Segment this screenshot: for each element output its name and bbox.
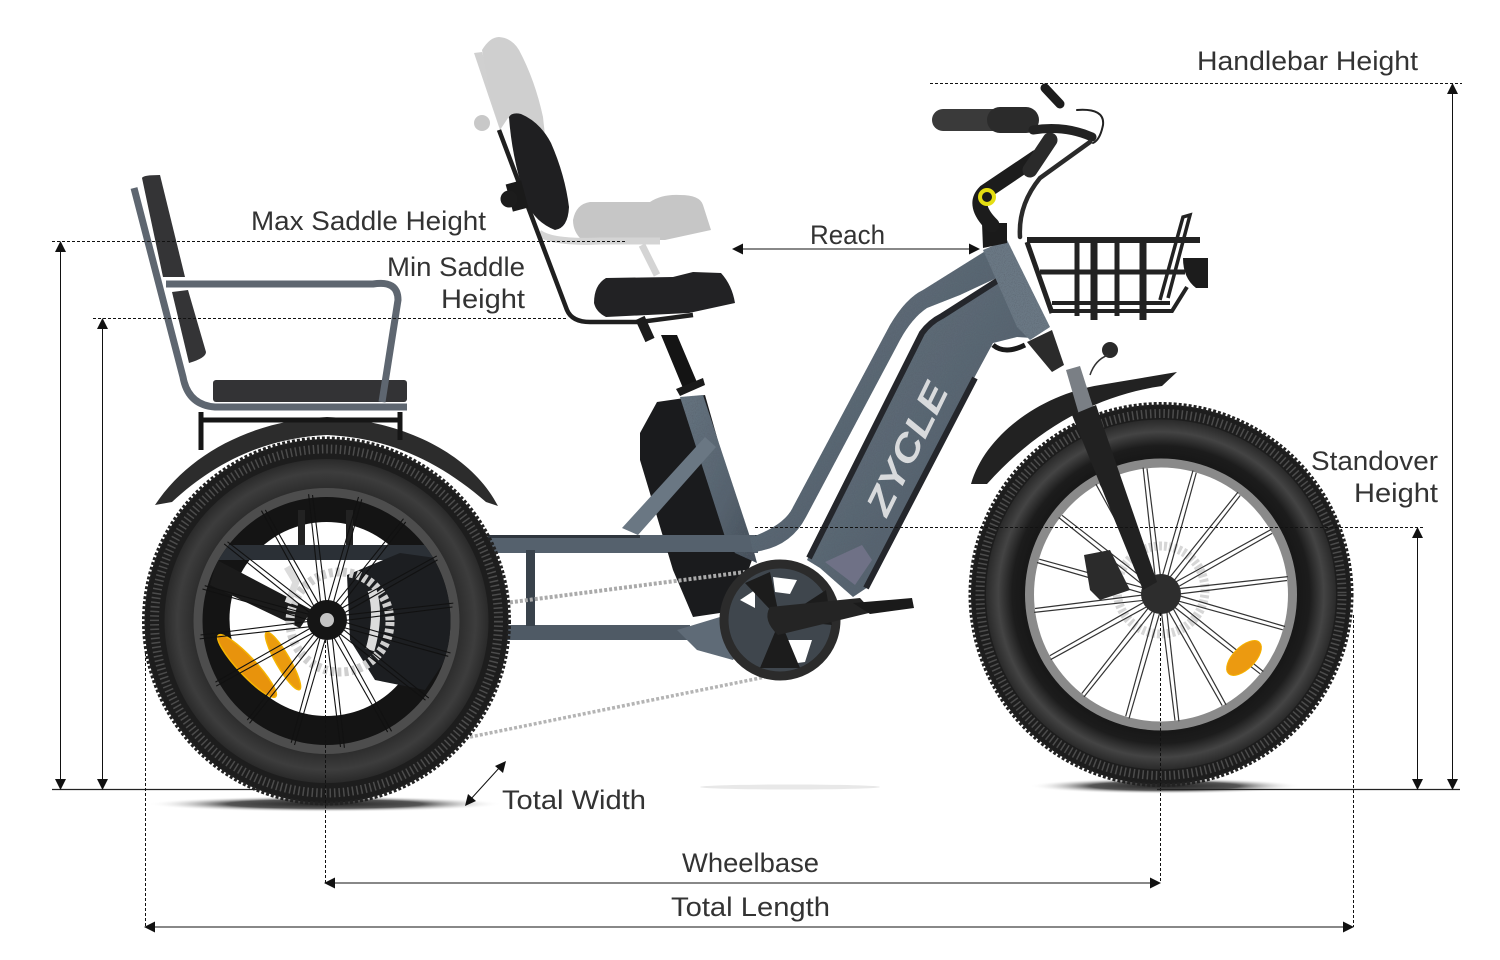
- label: min saddle height: [387, 252, 526, 314]
- bottom bracket housing: [677, 617, 760, 660]
- arrow: wheelbase: [324, 878, 1161, 888]
- label: standover height: Height: [1354, 478, 1439, 508]
- front reflector: [1221, 635, 1267, 681]
- rear wheel inner frame and gears: [205, 510, 452, 690]
- label: standover height: [1311, 446, 1439, 508]
- main frame: [750, 240, 1050, 597]
- label: reach: Reach: [810, 220, 885, 250]
- headlight: [1183, 258, 1208, 288]
- label: min saddle height: Min Saddle: [387, 252, 525, 282]
- rear frame tubes: [488, 535, 758, 640]
- rear wheel spokes: [198, 492, 455, 750]
- front brake disc: [1117, 546, 1205, 634]
- head tube: [983, 240, 1050, 340]
- label: wheelbase: Wheelbase: [682, 848, 819, 878]
- rear battery: [640, 395, 752, 617]
- label: total length: Total Length: [671, 892, 830, 922]
- chains: [470, 572, 765, 737]
- rear wheel: [144, 438, 509, 804]
- front hub: [1141, 574, 1181, 614]
- arrow: handlebar height: [1447, 83, 1458, 790]
- label: handlebar height: Handlebar Height: [1197, 46, 1419, 76]
- rear hub: [307, 600, 347, 640]
- cross tube over battery: [640, 535, 755, 552]
- ghost raised seat: [474, 37, 711, 275]
- label: total width: Total Width: [502, 785, 646, 815]
- ground shadows: [147, 778, 1301, 812]
- brake hose: [993, 345, 1025, 350]
- crank arm: [767, 598, 873, 635]
- frame down tube: [807, 277, 1032, 597]
- down tube edges: [809, 279, 1000, 588]
- ground line left: [52, 788, 270, 790]
- label: max saddle height: Max Saddle Height: [251, 206, 487, 236]
- pedal: [853, 598, 914, 614]
- label: min saddle height: Height: [441, 284, 526, 314]
- fork: [1027, 330, 1157, 590]
- logo: ZYCLE: [857, 375, 957, 523]
- frame top tube: [750, 250, 1003, 552]
- rear reflectors: [212, 629, 282, 703]
- label: standover height: Standover: [1311, 446, 1438, 476]
- seat tube: [680, 395, 757, 563]
- diagonal strut: [622, 437, 716, 535]
- arrow: max saddle height: [55, 241, 66, 790]
- rear seat and rack: [134, 175, 407, 450]
- front wheel spokes: [1032, 466, 1290, 723]
- front brake caliper: [1084, 550, 1130, 600]
- front wheel: [970, 404, 1352, 785]
- front basket: [1027, 215, 1208, 320]
- arrow: reach: [732, 244, 980, 254]
- front stem and handlebar: [943, 88, 1103, 248]
- ground line right: [1157, 788, 1460, 790]
- down tube lower accent: [825, 545, 872, 585]
- main saddle and backrest: [499, 113, 735, 396]
- front fender: [971, 372, 1177, 484]
- arrow: standover height: [1412, 527, 1423, 790]
- arrow: total width: [465, 761, 506, 806]
- rear fender: [155, 417, 498, 506]
- arrow: total length: [144, 922, 1354, 932]
- seat post: [661, 335, 699, 393]
- crank and chainring: [724, 564, 914, 676]
- arrow: min saddle height: [97, 318, 108, 790]
